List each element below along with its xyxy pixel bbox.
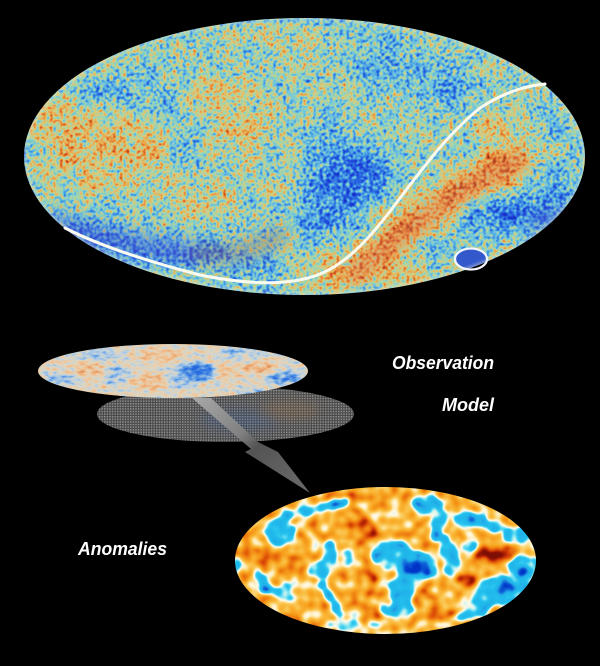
warm band smoothing overlay [350, 158, 525, 278]
label: Model: Model [442, 395, 495, 415]
deep cold patches [405, 560, 431, 576]
label: Observation: Observation [392, 353, 494, 373]
faint model colour [200, 402, 320, 430]
muted galactic plane overlay [45, 212, 580, 254]
cold patches [232, 494, 539, 630]
label: Anomalies: Anomalies [77, 539, 167, 559]
arrow from discs to anomalies map [192, 398, 310, 493]
pale limb of map [24, 18, 584, 294]
observation temperature field [38, 344, 308, 398]
sky temperature field [15, 10, 595, 305]
cold spot outline [455, 248, 487, 270]
anomalies temperature field [235, 487, 536, 634]
panel: full-sky observation map [15, 10, 595, 305]
panel: observation sky disc [38, 344, 308, 398]
warm patches [240, 492, 517, 626]
hemispheric asymmetry curve [65, 84, 545, 283]
panel: model sky disc [97, 386, 354, 442]
panel: anomalies map [235, 487, 536, 634]
warm galactic band [335, 155, 530, 285]
cold spot fill [456, 249, 486, 269]
